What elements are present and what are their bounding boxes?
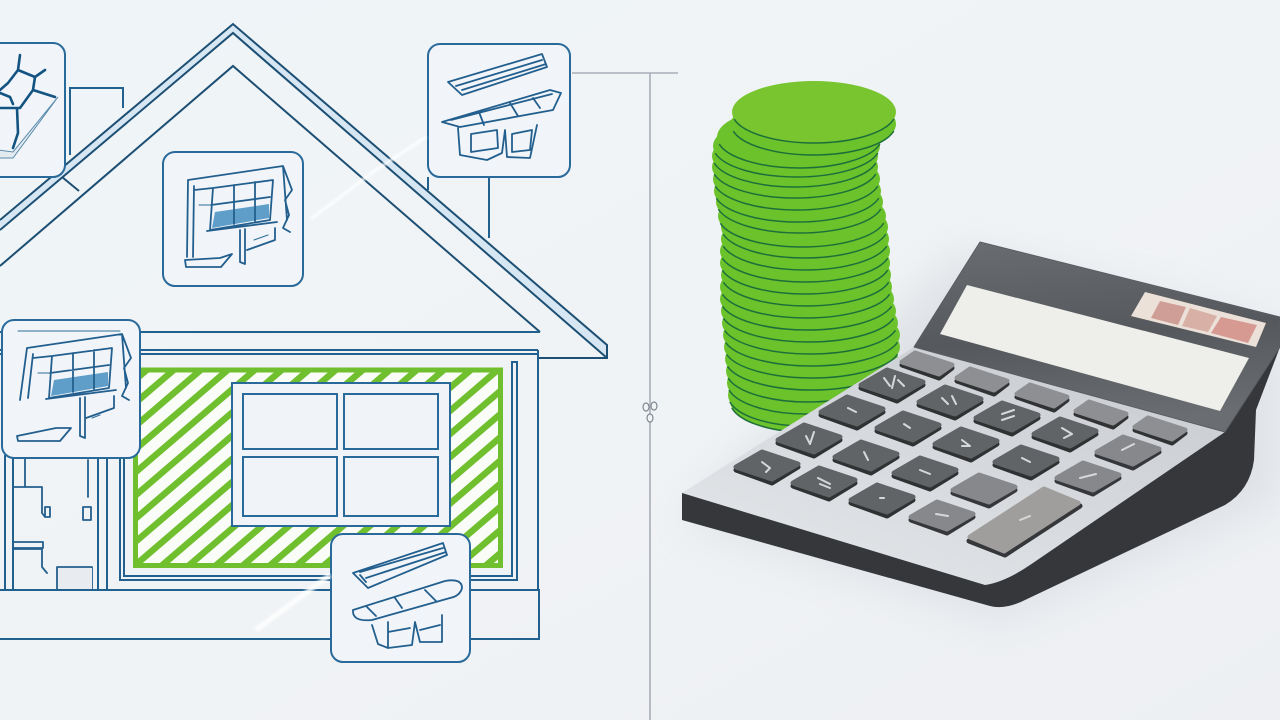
keypad (736, 353, 1185, 555)
function keys (902, 353, 952, 378)
number keys (861, 370, 923, 401)
dimension marks (643, 402, 657, 422)
window (232, 383, 450, 526)
solar panel (1131, 292, 1266, 347)
calculator (682, 242, 1280, 607)
white connector streaks (256, 137, 426, 630)
callout: cracked roof tile (0, 43, 65, 177)
green hatched wall (133, 368, 503, 568)
roof outlines (0, 24, 607, 358)
callout: window detail lower (2, 320, 140, 458)
large equals key (969, 492, 1080, 555)
vertical dimension line (572, 73, 678, 720)
left room fittings (13, 458, 92, 590)
left chimney (70, 88, 123, 155)
wall frame (120, 362, 517, 580)
calculator shadow (680, 250, 1280, 620)
callout: gutter detail lower (331, 534, 470, 662)
green coin stack (712, 81, 900, 432)
callout: gutter detail upper (428, 44, 570, 177)
calculator key deck (682, 347, 1225, 585)
house line drawing (0, 22, 608, 640)
ceiling and walls (0, 332, 540, 590)
key glyph marks (762, 376, 1134, 520)
eave tick (62, 177, 79, 191)
display screen (940, 285, 1249, 411)
right chimney (428, 177, 489, 238)
roof band (0, 24, 607, 358)
top coin (732, 81, 896, 143)
left room walls (5, 455, 107, 590)
foundation (0, 590, 539, 639)
calculator dark base (682, 317, 1280, 607)
callout: window detail upper (163, 152, 303, 286)
display housing (914, 242, 1280, 432)
